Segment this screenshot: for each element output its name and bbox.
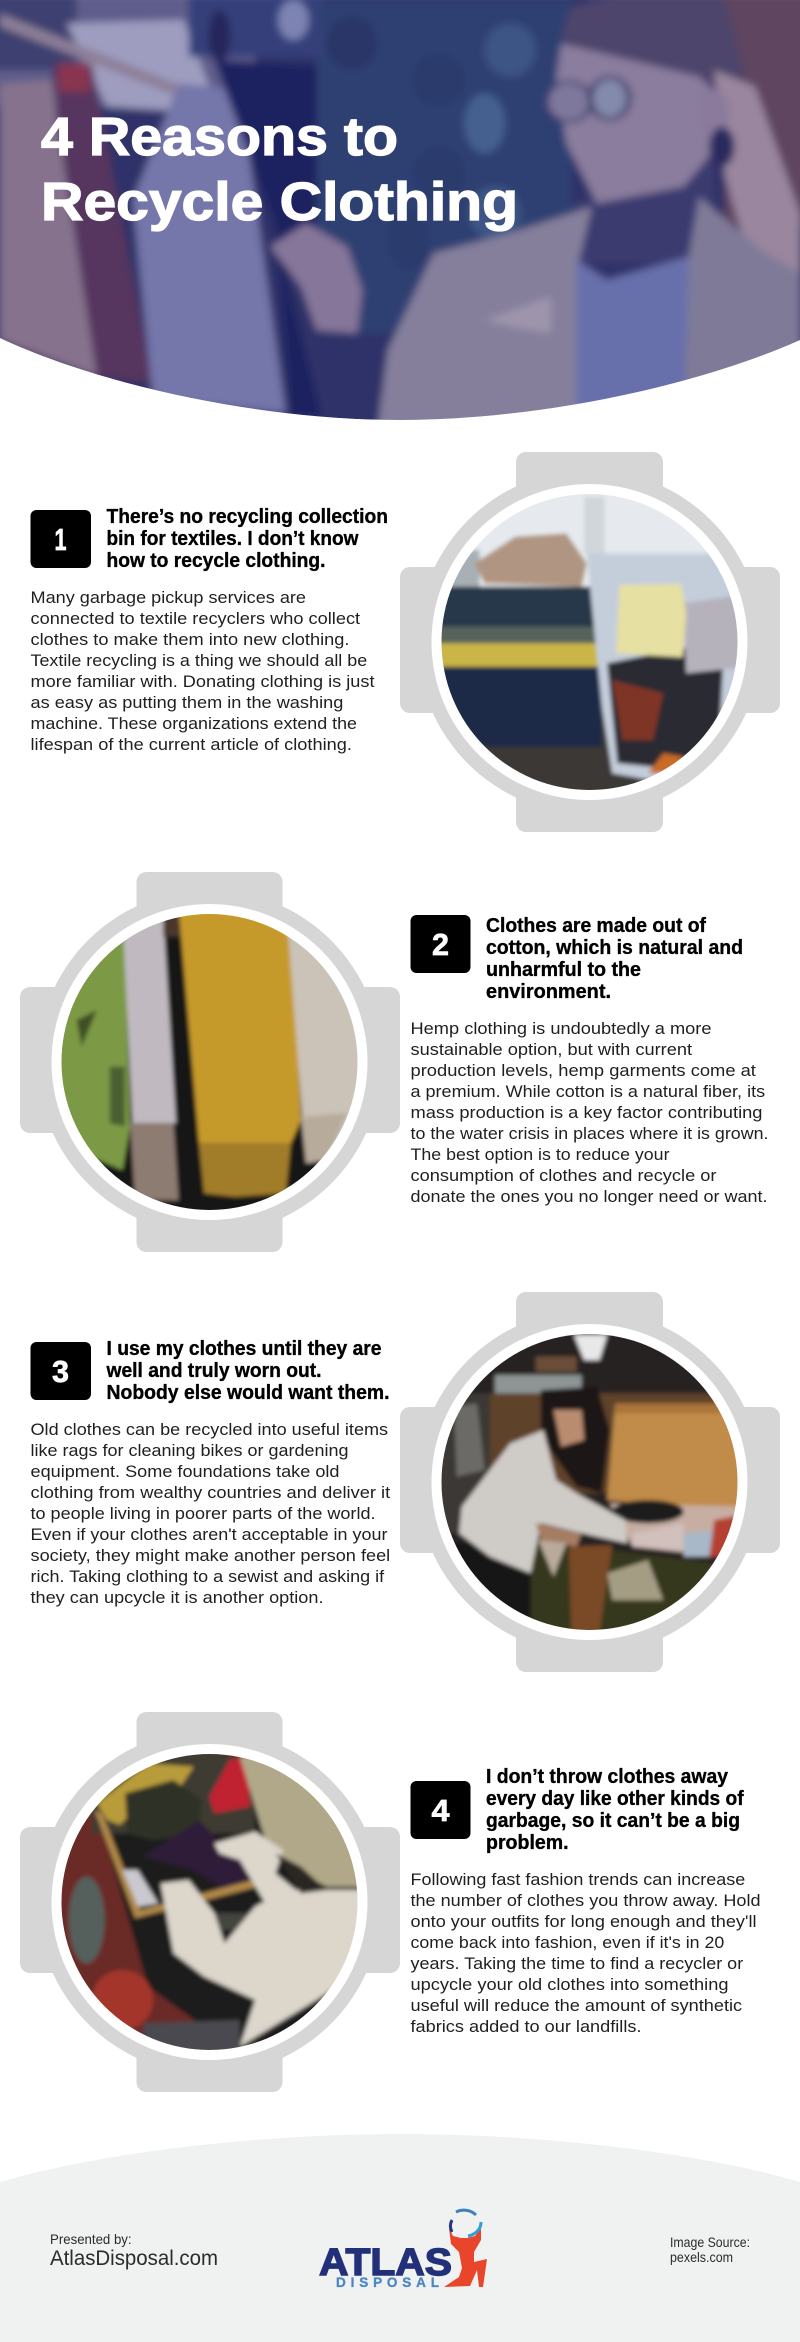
image source text xyxy=(670,2234,750,2265)
body text 4: come back into fashion, even if it's in 20 xyxy=(410,1934,724,1952)
watch frame with photo: donation cup xyxy=(400,452,780,832)
heading 1 xyxy=(106,505,388,572)
heading 4: I don’t throw clothes away xyxy=(486,1765,729,1788)
heading 2: cotton, which is natural and xyxy=(486,936,743,959)
presented by text xyxy=(50,2231,218,2270)
body text 4: useful will reduce the amount of synthetic xyxy=(410,1997,742,2015)
body text 2: sustainable option, but with current xyxy=(410,1041,693,1059)
panel: reason 2 xyxy=(20,872,768,1252)
heading 1: bin for textiles. I don’t know xyxy=(106,527,359,550)
heading 1: There’s no recycling collection xyxy=(106,505,388,528)
body text 4: the number of clothes you throw away. Hold xyxy=(410,1892,760,1910)
body text 2: mass production is a key factor contributing xyxy=(410,1104,762,1122)
body text 4: Following fast fashion trends can increase xyxy=(410,1871,745,1889)
heading 2: unharmful to the xyxy=(486,958,641,981)
heading 2: Clothes are made out of xyxy=(486,914,706,937)
watch frame with photo: shirts xyxy=(20,872,400,1252)
body text 3: equipment. Some foundations take old xyxy=(30,1463,340,1481)
panel: reason 4 xyxy=(20,1712,760,2092)
heading 4: every day like other kinds of xyxy=(486,1787,744,1810)
heading 3: Nobody else would want them. xyxy=(106,1381,390,1404)
heading 3: I use my clothes until they are xyxy=(106,1337,382,1360)
body text 2: donate the ones you no longer need or want. xyxy=(410,1188,768,1206)
body text 3: clothing from wealthy countries and deliver it xyxy=(30,1484,391,1502)
body text 3: rich. Taking clothing to a sewist and asking if xyxy=(30,1568,385,1586)
heading 4: garbage, so it can’t be a big xyxy=(486,1809,740,1832)
body text 1: Many garbage pickup services are xyxy=(30,589,306,607)
logo: Atlas Disposal: DISPOSAL xyxy=(336,2275,439,2290)
image source text: Image Source: xyxy=(670,2234,750,2250)
number badge 4 xyxy=(410,1781,470,1839)
logo: Atlas Disposal: ATLAS xyxy=(319,2242,452,2284)
body text 1: as easy as putting them in the washing xyxy=(30,694,343,712)
heading 2 xyxy=(486,914,743,1003)
title: 4 Reasons to xyxy=(41,107,398,167)
body text 3: to people living in poorer parts of the world. xyxy=(30,1505,376,1523)
panel: reason 1 xyxy=(30,452,780,832)
body text 2: Hemp clothing is undoubtedly a more xyxy=(410,1020,712,1038)
body text 1 xyxy=(30,589,375,754)
body text 2: consumption of clothes and recycle or xyxy=(410,1167,717,1185)
watch frame with photo: person sorting clothes xyxy=(20,1712,400,2092)
number badge 3 xyxy=(30,1342,91,1400)
body text 2: to the water crisis in places where it is grown. xyxy=(410,1125,768,1143)
body text 4: years. Taking the time to find a recycler or xyxy=(410,1955,744,1973)
number badge 3: 3 xyxy=(52,1354,69,1389)
number badge 1: 1 xyxy=(54,522,66,557)
body text 3: Even if your clothes aren't acceptable in your xyxy=(30,1526,388,1544)
title xyxy=(41,107,518,232)
number badge 2 xyxy=(410,915,470,973)
body text 3 xyxy=(30,1421,391,1607)
heading 2: environment. xyxy=(486,980,611,1003)
heading 4 xyxy=(486,1765,744,1854)
body text 3: they can upcycle it is another option. xyxy=(30,1589,324,1607)
presented by text: Presented by: xyxy=(50,2231,132,2247)
number badge 1 xyxy=(30,510,91,568)
heading 3 xyxy=(106,1337,390,1404)
hero photo banner xyxy=(0,0,800,440)
body text 2: production levels, hemp garments come at xyxy=(410,1062,756,1080)
heading 3: well and truly worn out. xyxy=(106,1359,322,1382)
body text 1: machine. These organizations extend the xyxy=(30,715,357,733)
panel: reason 3 xyxy=(30,1292,780,1672)
body text 4: upcycle your old clothes into something xyxy=(410,1976,728,1994)
body text 1: clothes to make them into new clothing. xyxy=(30,631,350,649)
heading 4: problem. xyxy=(486,1831,569,1854)
body text 2: a premium. While cotton is a natural fiber, its xyxy=(410,1083,765,1101)
watch frame with photo: woman at chest xyxy=(400,1292,780,1672)
body text 3: society, they might make another person feel xyxy=(30,1547,390,1565)
logo: Atlas Disposal xyxy=(319,2210,487,2290)
body text 2 xyxy=(410,1020,768,1206)
heading 1: how to recycle clothing. xyxy=(106,549,326,572)
body text 3: Old clothes can be recycled into useful items xyxy=(30,1421,388,1439)
body text 4: fabrics added to our landfills. xyxy=(410,2018,642,2036)
image source text: pexels.com xyxy=(670,2249,733,2265)
body text 1: more familiar with. Donating clothing is just xyxy=(30,673,375,691)
body text 4 xyxy=(410,1871,760,2036)
presented by text: AtlasDisposal.com xyxy=(50,2247,218,2270)
number badge 4: 4 xyxy=(432,1793,450,1828)
body text 3: like rags for cleaning bikes or gardening xyxy=(30,1442,348,1460)
footer xyxy=(0,2134,800,2342)
body text 2: The best option is to reduce your xyxy=(410,1146,670,1164)
body text 1: lifespan of the current article of clothing. xyxy=(30,736,352,754)
body text 1: Textile recycling is a thing we should all be xyxy=(30,652,367,670)
body text 4: onto your outfits for long enough and they'll xyxy=(410,1913,756,1931)
body text 1: connected to textile recyclers who collect xyxy=(30,610,361,628)
number badge 2: 2 xyxy=(432,927,449,962)
title: Recycle Clothing xyxy=(41,172,518,232)
